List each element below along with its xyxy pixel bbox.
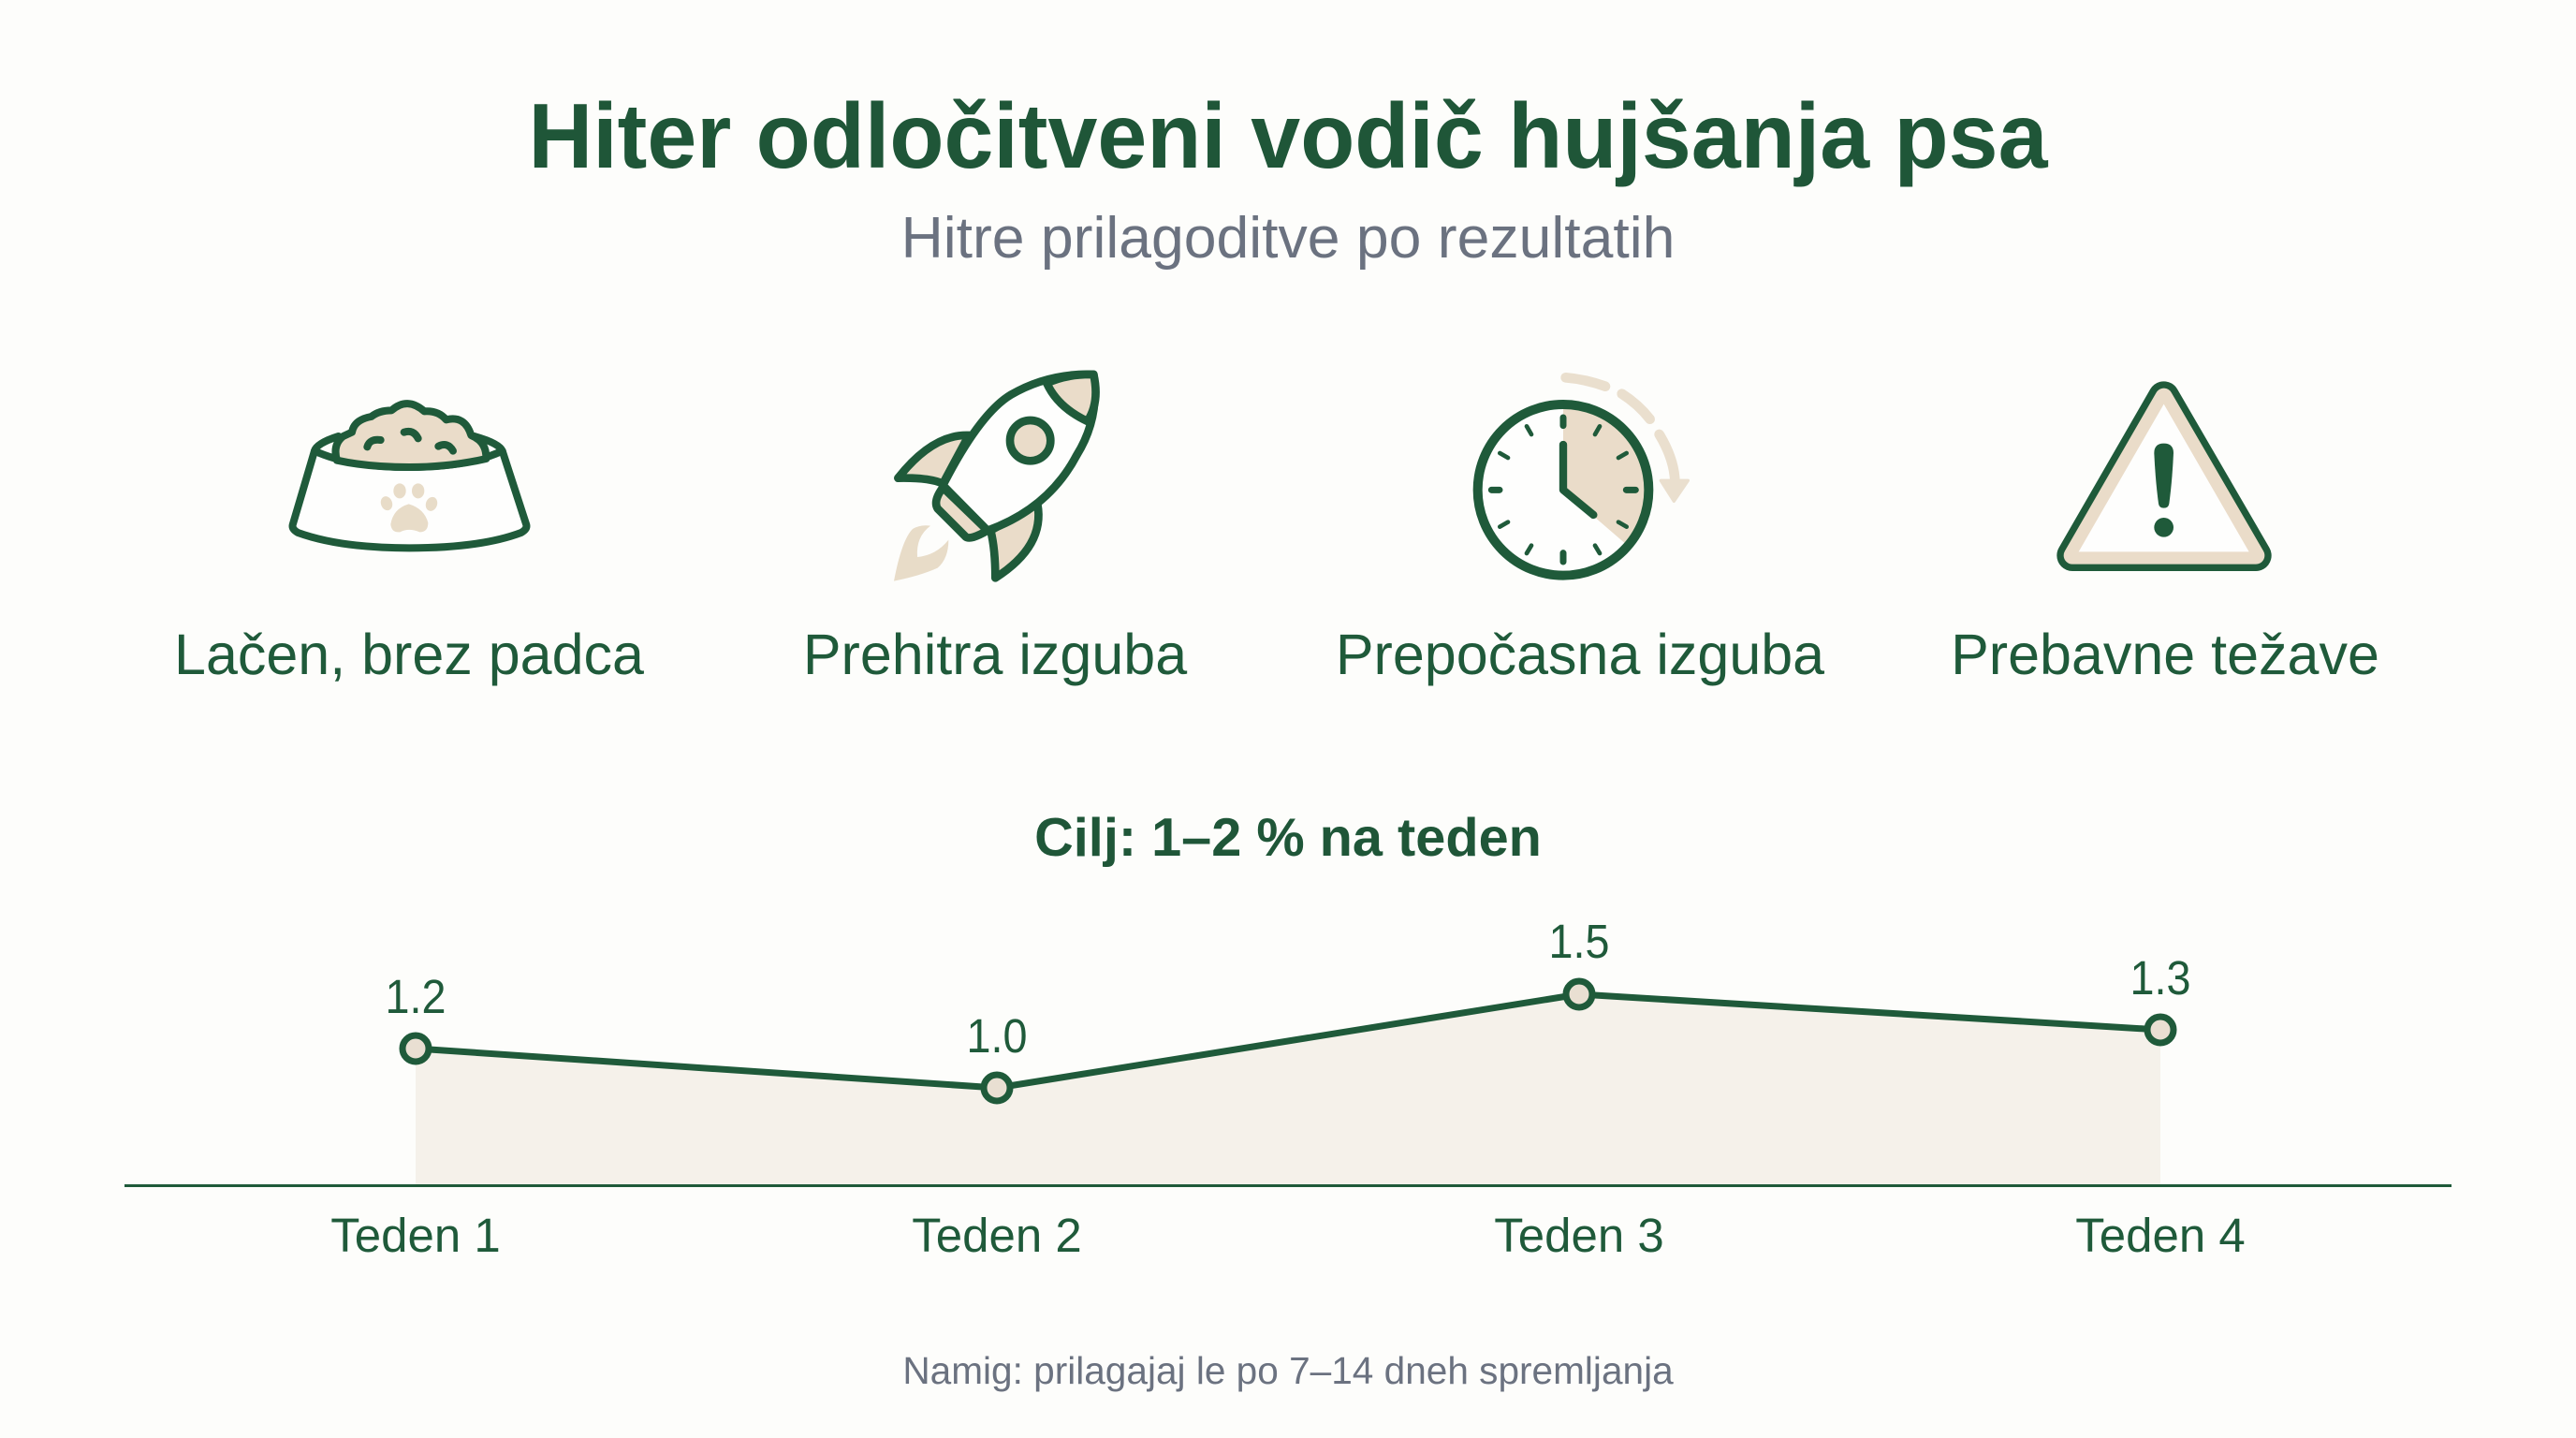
line chart: Teden 1 (330, 1209, 501, 1262)
icon: rocket (894, 374, 1096, 581)
label: digestive issues: Prebavne težave (1951, 623, 2379, 686)
footer tip: Namig: prilagajaj le po 7–14 dneh spremljanja (902, 1349, 1674, 1392)
icon: warning triangle (2072, 397, 2256, 555)
icon: dog food bowl (293, 404, 526, 548)
icon: clock (1478, 377, 1688, 576)
chart heading: Cilj: 1–2 % na teden (1034, 808, 1542, 868)
line chart (124, 915, 2452, 1262)
line chart: 1.0 (966, 1009, 1028, 1063)
line chart: Teden 2 (912, 1209, 1082, 1262)
line chart: 1.2 (386, 970, 446, 1023)
label: too fast: Prehitra izguba (803, 623, 1187, 686)
subtitle: Hitre prilagoditve po rezultatih (901, 205, 1675, 271)
line chart: 1.5 (1548, 915, 1610, 968)
line chart: Teden 4 (2075, 1209, 2246, 1262)
line chart: Teden 3 (1494, 1209, 1664, 1262)
title: Hiter odločitveni vodič hujšanja psa (528, 84, 2049, 187)
line chart: 1.3 (2130, 951, 2190, 1005)
label: hungry: Lačen, brez padca (174, 623, 644, 686)
label: too slow: Prepočasna izguba (1336, 623, 1824, 686)
